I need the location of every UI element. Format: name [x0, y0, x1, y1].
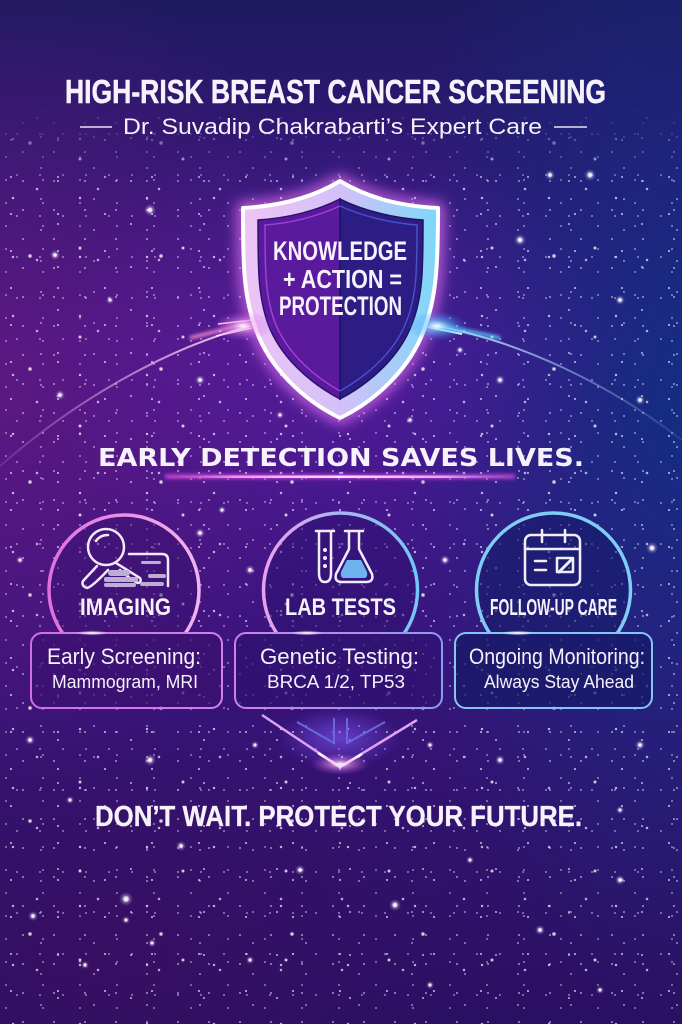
imaging ring: [47, 513, 201, 632]
call to action: DON’T WAIT. PROTECT YOUR FUTURE.: [95, 801, 582, 833]
subtitle: Dr. Suvadip Chakrabarti’s Expert Care: [123, 114, 542, 139]
follow-up card: [455, 630, 652, 708]
panel: lab tests: [235, 513, 442, 708]
arrow: downward chevron: [262, 708, 417, 775]
lab tests card: [235, 630, 442, 708]
icon: test tube and flask: [316, 531, 372, 582]
imaging card: [31, 630, 222, 708]
imaging card: Mammogram, MRI: [52, 672, 198, 692]
lab tests card: Genetic Testing:: [260, 644, 419, 669]
icon: calendar: [525, 530, 580, 585]
lab tests label: LAB TESTS: [285, 594, 396, 621]
shield motto: + ACTION =: [283, 264, 402, 294]
follow-up card: Ongoing Monitoring:: [469, 644, 645, 669]
follow-up card: Always Stay Ahead: [484, 672, 634, 692]
shield motto: [273, 236, 407, 321]
follow-up ring: [474, 511, 632, 632]
lab tests ring: [262, 511, 420, 632]
imaging card: Early Screening:: [47, 644, 201, 669]
icon: magnifier over scan: [82, 529, 168, 588]
lab tests card: BRCA 1/2, TP53: [267, 672, 405, 692]
horizon arc: [0, 320, 682, 466]
panel: follow-up care: [455, 513, 652, 708]
heading underline: [165, 474, 515, 479]
shield: [243, 181, 438, 418]
shield flares: [213, 311, 467, 341]
shield motto: PROTECTION: [279, 291, 402, 321]
shield motto: KNOWLEDGE: [273, 236, 407, 266]
imaging label: IMAGING: [80, 594, 171, 621]
panel: imaging: [31, 515, 222, 708]
heading: early detection: EARLY DETECTION SAVES LIVES.: [98, 443, 584, 472]
bright stars: [16, 169, 658, 994]
